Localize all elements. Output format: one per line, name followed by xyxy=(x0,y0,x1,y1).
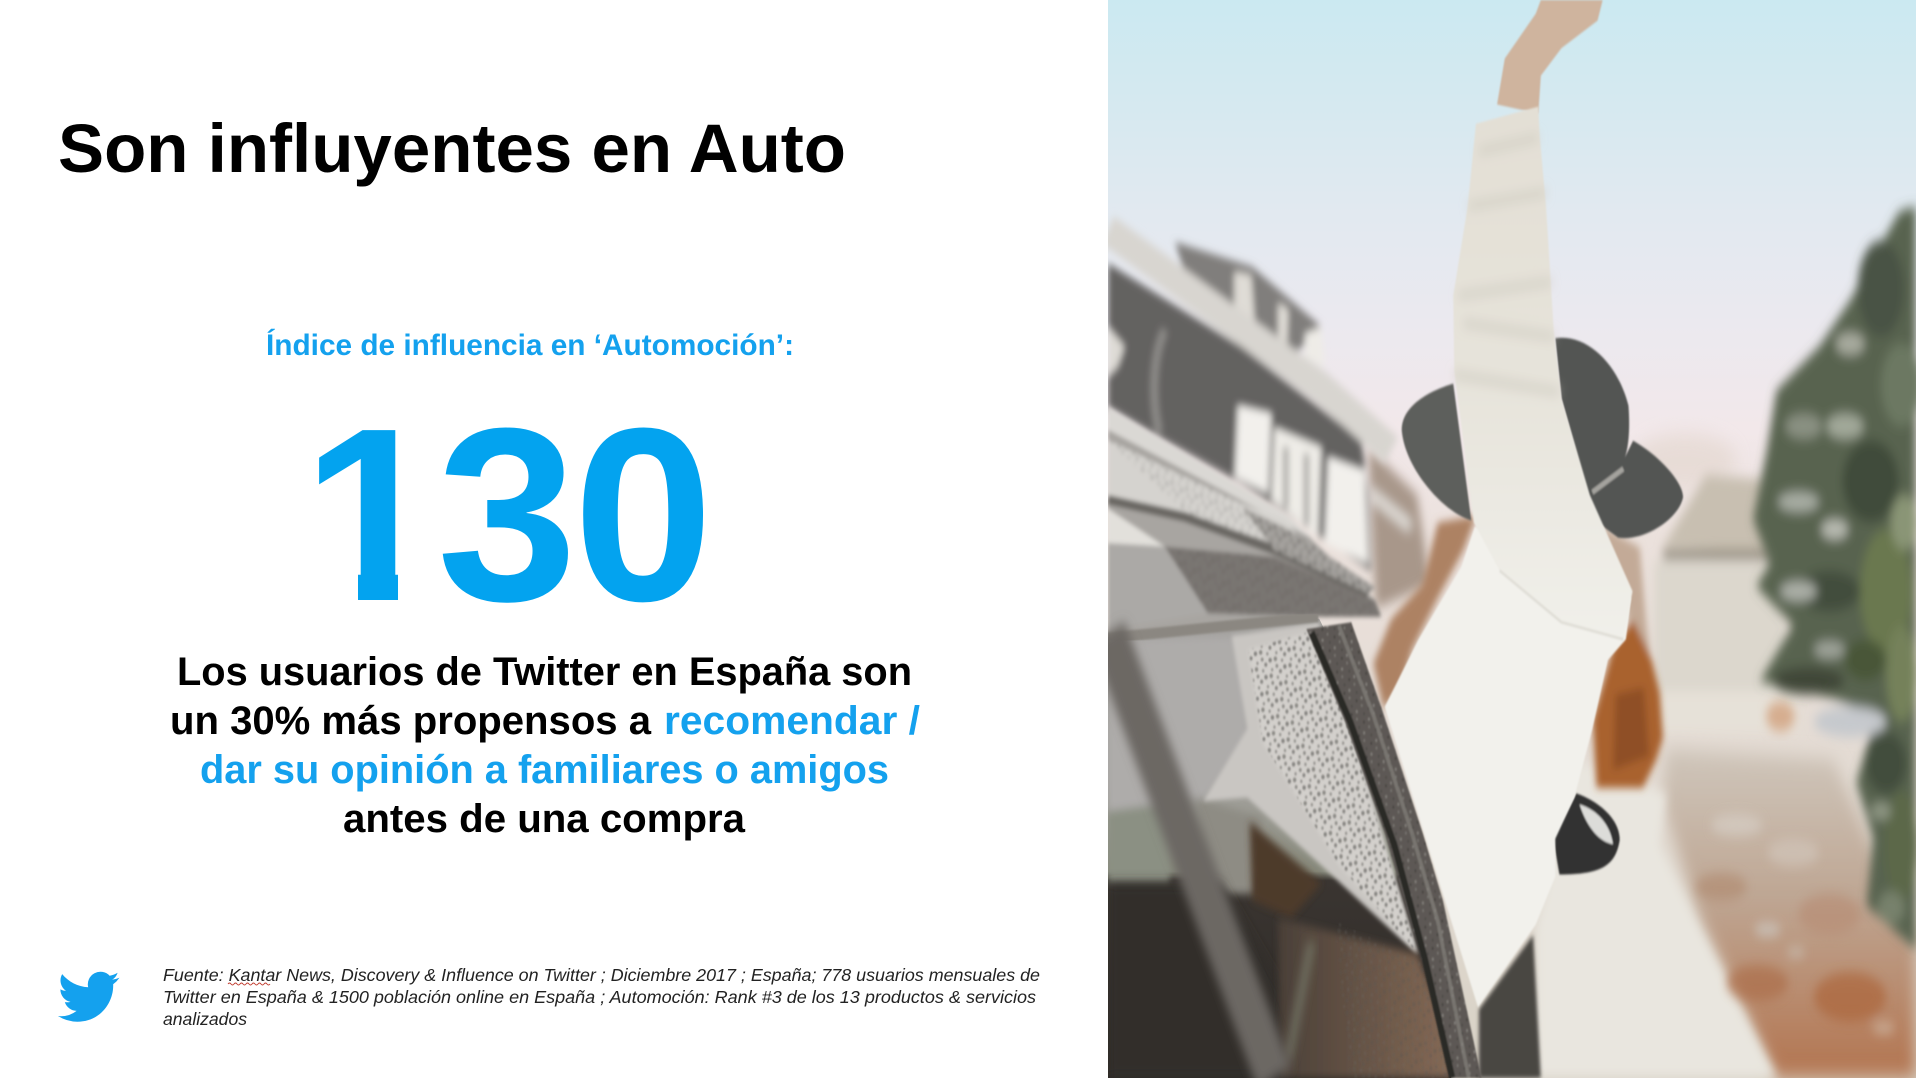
woman hand and forearm xyxy=(1497,0,1603,113)
paragraph: dar su opinión a familiares o amigos xyxy=(200,748,889,792)
door frame xyxy=(1306,622,1482,1078)
rear car body xyxy=(1479,935,1541,1078)
text panel xyxy=(58,110,1040,1029)
source footnote: Fuente: Kantar News, Discovery & Influence on Twitter ; Diciembre 2017 ; España; 778 usuarios mensuales de xyxy=(163,965,1040,985)
woman hair right xyxy=(1593,525,1663,788)
paragraph xyxy=(170,650,920,841)
ground: road and gravel xyxy=(1536,701,1916,1078)
car roof with rain xyxy=(1108,407,1381,637)
source footnote: analizados xyxy=(163,1009,247,1029)
house xyxy=(1108,230,1430,608)
window seal strip xyxy=(1108,617,1318,638)
source footnote xyxy=(163,965,1040,1029)
a-pillar xyxy=(1108,633,1274,1078)
sweatshirt body xyxy=(1385,527,1631,1007)
title: Son influyentes en Auto xyxy=(58,110,846,187)
subheading: Índice de influencia en ‘Automoción’: xyxy=(266,328,794,362)
woman hair left xyxy=(1373,516,1476,710)
background garage xyxy=(1654,474,1799,732)
photo: woman waving from car window xyxy=(1108,0,1916,1078)
icon: twitter bird xyxy=(58,972,119,1022)
source footnote: Twitter en España & 1500 población online en España ; Automoción: Rank #3 de los 13 productos & servicios xyxy=(163,987,1036,1007)
paragraph: antes de una compra xyxy=(343,797,746,841)
paragraph: Los usuarios de Twitter en España son xyxy=(177,650,912,694)
raised arm sleeve xyxy=(1453,107,1633,639)
bush xyxy=(1753,206,1916,950)
big number: 130 xyxy=(302,376,713,652)
hazy horizon xyxy=(1634,433,1737,488)
car window reflection xyxy=(1108,619,1479,1078)
sky xyxy=(1108,0,1916,1078)
side mirror xyxy=(1553,793,1620,874)
paragraph: un 30% más propensos a xyxy=(170,699,652,743)
paragraph: recomendar / xyxy=(664,699,920,743)
hat xyxy=(1402,338,1683,538)
